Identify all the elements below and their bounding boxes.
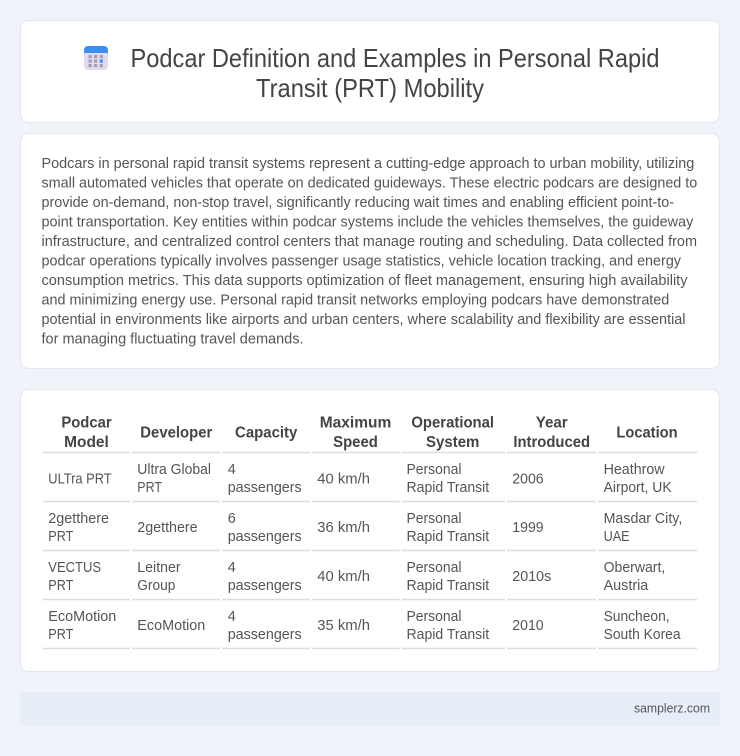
table row: EcoMotion PRT — [48, 609, 681, 643]
table row: ULTra PRT: Airport, UK — [604, 480, 672, 496]
table row: 2getthere PRT: 2getthere — [48, 511, 109, 527]
table row: 2getthere PRT: 36 km/h — [317, 520, 370, 536]
table row: EcoMotion PRT: Suncheon, — [604, 609, 670, 625]
table header: Location — [616, 425, 678, 442]
table row: ULTra PRT: Ultra Global — [137, 462, 211, 478]
table row: EcoMotion PRT: 35 km/h — [317, 618, 370, 634]
text block: description: provide on-demand, non-stop travel, significantly reducing wait times and enabling efficient point-to- — [42, 195, 674, 211]
table row: ULTra PRT: Personal — [406, 462, 462, 478]
table row: EcoMotion PRT: passengers — [228, 627, 302, 643]
table row: EcoMotion PRT: South Korea — [604, 627, 681, 643]
table row: VECTUS PRT: 2010s — [512, 569, 551, 585]
table row: EcoMotion PRT: EcoMotion — [48, 609, 116, 625]
icon: calendar — [84, 46, 108, 70]
text block: description — [42, 156, 697, 348]
table row: 2getthere PRT: 6 — [228, 511, 236, 527]
text block: description: Podcars in personal rapid transit systems represent a cutting-edge approach to urban mobility, utilizing — [42, 156, 694, 172]
table row: ULTra PRT: 40 km/h — [317, 471, 370, 487]
table row: 2getthere PRT: Masdar City, — [604, 511, 682, 527]
table header: Operational — [411, 415, 494, 432]
table row: 2getthere PRT — [48, 511, 682, 545]
table row: 2getthere PRT: Rapid Transit — [406, 529, 489, 545]
heading: Podcar Definition and Examples in Personal Rapid — [130, 45, 660, 73]
table row: VECTUS PRT: VECTUS — [48, 560, 101, 576]
table row: 2getthere PRT: 2getthere — [137, 520, 198, 536]
table row: 2getthere PRT: UAE — [604, 529, 630, 545]
table row: VECTUS PRT: Austria — [604, 578, 648, 594]
table header: System — [426, 434, 479, 451]
table row: ULTra PRT: Heathrow — [604, 462, 665, 478]
text block: description: potential in environments like airports and urban centers, where scalability and flexibility are essential — [42, 312, 686, 328]
table row: EcoMotion PRT: EcoMotion — [137, 618, 205, 634]
table row: VECTUS PRT: 4 — [228, 560, 236, 576]
table row: 2getthere PRT: Personal — [406, 511, 462, 527]
table row: VECTUS PRT: Rapid Transit — [406, 578, 489, 594]
table header: Introduced — [513, 434, 590, 451]
text block: description: small automated vehicles that operate on dedicated guideways. These electric podcars are designed to — [42, 176, 697, 192]
table row: VECTUS PRT: Oberwart, — [604, 560, 665, 576]
table header: Developer — [140, 425, 212, 442]
table row: VECTUS PRT — [48, 560, 665, 594]
table header: Capacity — [235, 425, 297, 442]
text block: description: podcar operations typically involves passenger usage statistics, vehicle location tracking, and energy — [42, 254, 682, 270]
table row: ULTra PRT: passengers — [228, 480, 302, 496]
table row: ULTra PRT: Rapid Transit — [406, 480, 489, 496]
table row: ULTra PRT: 4 — [228, 462, 236, 478]
footer source text: samplerz.com — [634, 701, 710, 716]
table row: VECTUS PRT: 40 km/h — [317, 569, 370, 585]
table row: EcoMotion PRT: 4 — [228, 609, 236, 625]
text block: description: and minimizing energy use. Personal rapid transit networks employing podcars have demonstrated — [42, 292, 669, 308]
text block: description: for managing fluctuating travel demands. — [42, 332, 304, 348]
table header: Maximum — [320, 415, 391, 432]
text block: description: infrastructure, and centralized control centers that manage routing and scheduling. Data collected from — [42, 234, 697, 250]
table row: VECTUS PRT: Group — [137, 578, 175, 594]
table header: Podcar — [61, 415, 112, 432]
table rules — [43, 452, 697, 648]
text block: description: point transportation. Key entities within podcar systems include the vehicles themselves, the guideway — [42, 214, 694, 230]
table row: 2getthere PRT: passengers — [228, 529, 302, 545]
table row: ULTra PRT: ULTra PRT — [48, 471, 112, 487]
table row: VECTUS PRT: PRT — [48, 578, 73, 594]
table row: EcoMotion PRT: 2010 — [512, 618, 544, 634]
table row: VECTUS PRT: Leitner — [137, 560, 181, 576]
table row: 2getthere PRT: PRT — [48, 529, 73, 545]
table row: EcoMotion PRT: PRT — [48, 627, 73, 643]
heading: Transit (PRT) Mobility — [256, 75, 484, 103]
panel: title — [20, 20, 720, 122]
table row: VECTUS PRT: Personal — [406, 560, 462, 576]
table row: EcoMotion PRT: Personal — [406, 609, 462, 625]
table header — [61, 415, 678, 451]
table header: Speed — [333, 434, 378, 451]
panel: comparison table — [20, 390, 720, 672]
table row: VECTUS PRT: passengers — [228, 578, 302, 594]
table row: EcoMotion PRT: Rapid Transit — [406, 627, 489, 643]
panel: description — [20, 134, 720, 368]
table row: ULTra PRT — [48, 462, 672, 496]
footer — [20, 692, 720, 726]
table row: 2getthere PRT: 1999 — [512, 520, 544, 536]
table header: Model — [64, 434, 109, 451]
table row: ULTra PRT: 2006 — [512, 471, 544, 487]
table row: ULTra PRT: PRT — [137, 480, 162, 496]
table header: Year — [536, 415, 568, 432]
text block: description: consumption metrics. This data supports optimization of fleet management, ensuring high availability — [42, 273, 688, 289]
heading — [130, 45, 660, 103]
